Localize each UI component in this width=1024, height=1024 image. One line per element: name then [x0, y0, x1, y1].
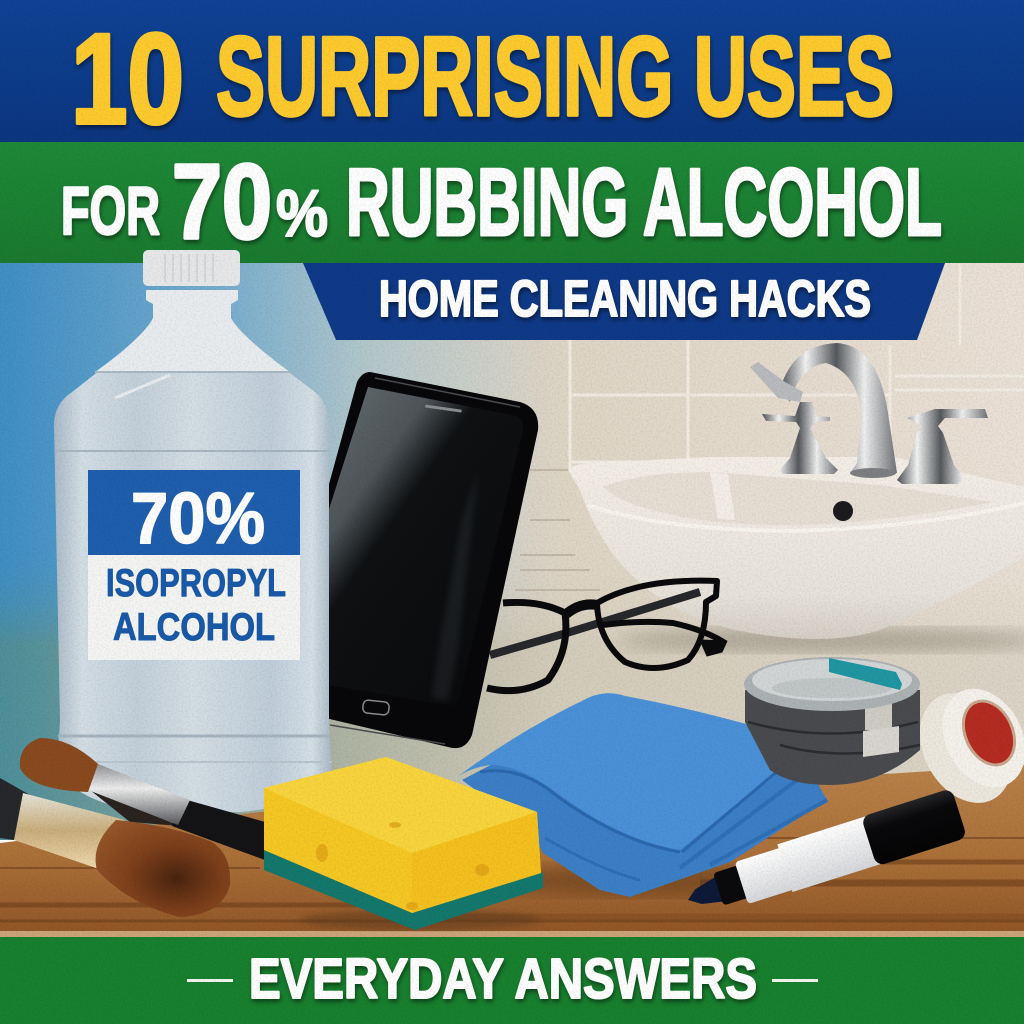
bottle label	[88, 470, 300, 660]
sink with faucet	[568, 343, 1024, 652]
microfiber cloth	[457, 693, 827, 897]
right handle	[897, 409, 988, 484]
bottle label: ISOPROPYL	[106, 562, 286, 605]
faucet spout	[750, 343, 897, 478]
makeup brush front	[0, 778, 230, 917]
left handle	[762, 402, 838, 474]
marker pen	[680, 788, 967, 924]
title line two: 70	[172, 143, 272, 261]
title line two: %	[276, 176, 328, 250]
subtitle banner: HOME CLEANING HACKS	[379, 270, 871, 327]
footer band: EVERYDAY ANSWERS	[249, 947, 757, 1011]
title line two: FOR	[61, 173, 160, 249]
title line one	[71, 8, 894, 151]
makeup brush back	[20, 738, 265, 860]
drain	[833, 501, 853, 521]
smartphone	[300, 372, 538, 748]
footer band	[0, 937, 1024, 1024]
subtitle banner	[303, 263, 945, 340]
bottle label: ALCOHOL	[113, 606, 275, 649]
header band: blue	[0, 0, 1024, 142]
title line two	[61, 143, 942, 261]
bottle	[54, 250, 332, 812]
header band: green	[0, 142, 1024, 263]
white tape roll	[902, 674, 1024, 819]
title line one: 10	[71, 8, 184, 151]
tape rolls	[744, 657, 1024, 819]
bottle label: 70%	[131, 479, 265, 559]
eyeglasses	[487, 581, 727, 691]
wooden table	[0, 765, 1024, 937]
yellow sponge	[264, 757, 543, 930]
background wall	[0, 262, 1024, 840]
bottle cap	[143, 250, 240, 286]
